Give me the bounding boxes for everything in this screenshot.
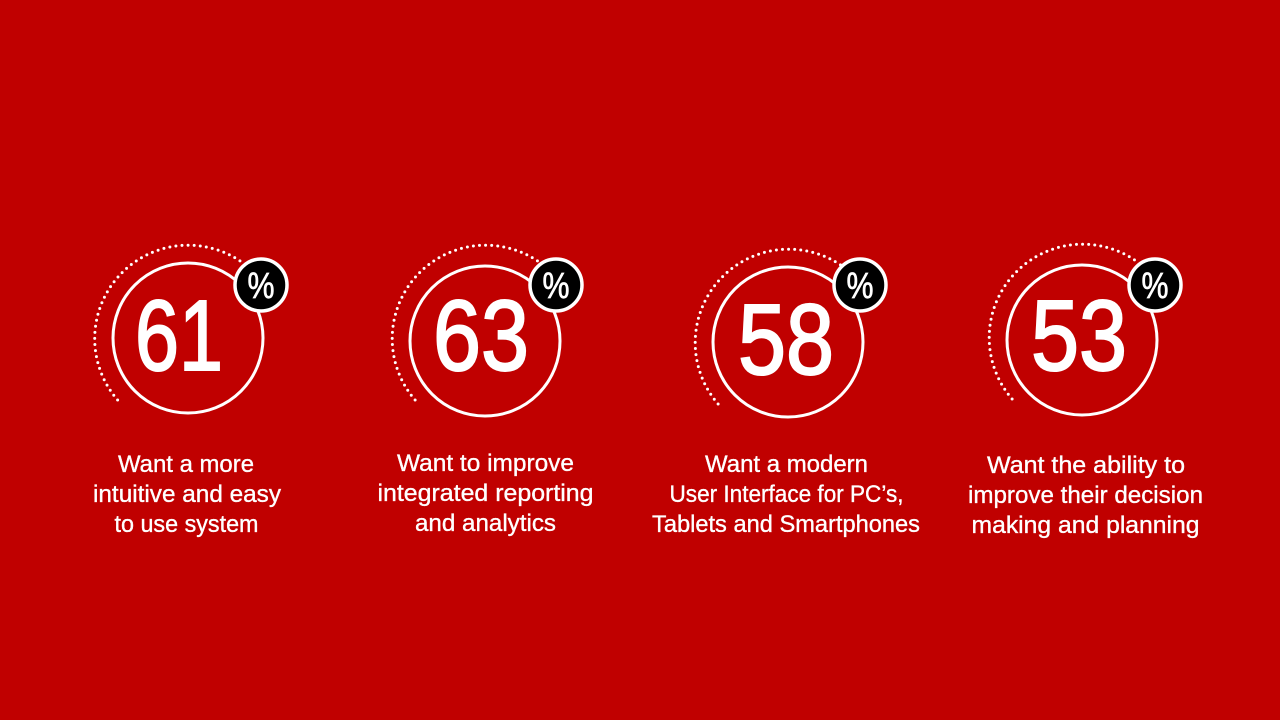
number: 61 <box>135 280 223 392</box>
caption: intuitive and easy <box>93 481 281 508</box>
caption <box>652 451 920 538</box>
percent badge: % <box>846 265 874 306</box>
number ring <box>713 267 863 417</box>
caption: Want a more <box>118 451 254 478</box>
panel: 53 percent <box>968 244 1203 539</box>
panel: 63 percent <box>378 245 594 537</box>
caption <box>93 451 281 538</box>
number ring <box>113 263 263 413</box>
caption: Want a modern <box>705 451 868 478</box>
caption: to use system <box>114 511 258 538</box>
number: 58 <box>738 284 834 396</box>
caption: and analytics <box>415 510 556 537</box>
dotted arc <box>989 244 1137 399</box>
number: 63 <box>433 280 529 392</box>
caption: integrated reporting <box>378 480 594 507</box>
number: 53 <box>1031 280 1127 392</box>
dotted arc <box>695 249 843 404</box>
caption: User Interface for PC’s, <box>670 481 904 508</box>
percent badge <box>530 259 582 311</box>
dotted arc <box>392 245 540 400</box>
percent badge <box>834 259 886 311</box>
caption: making and planning <box>972 512 1200 539</box>
panel: 61 percent <box>93 245 287 538</box>
caption <box>968 452 1203 539</box>
percent badge: % <box>542 265 570 306</box>
caption: Want the ability to <box>987 452 1185 479</box>
panel: 58 percent <box>652 249 920 538</box>
number ring <box>410 266 560 416</box>
caption <box>378 450 594 537</box>
percent badge: % <box>248 265 274 306</box>
caption: improve their decision <box>968 482 1203 509</box>
caption: Want to improve <box>397 450 574 477</box>
dotted arc <box>95 245 243 400</box>
percent badge: % <box>1142 265 1168 306</box>
caption: Tablets and Smartphones <box>652 511 920 538</box>
percent badge <box>235 259 287 311</box>
percent badge <box>1129 259 1181 311</box>
number ring <box>1007 265 1157 415</box>
